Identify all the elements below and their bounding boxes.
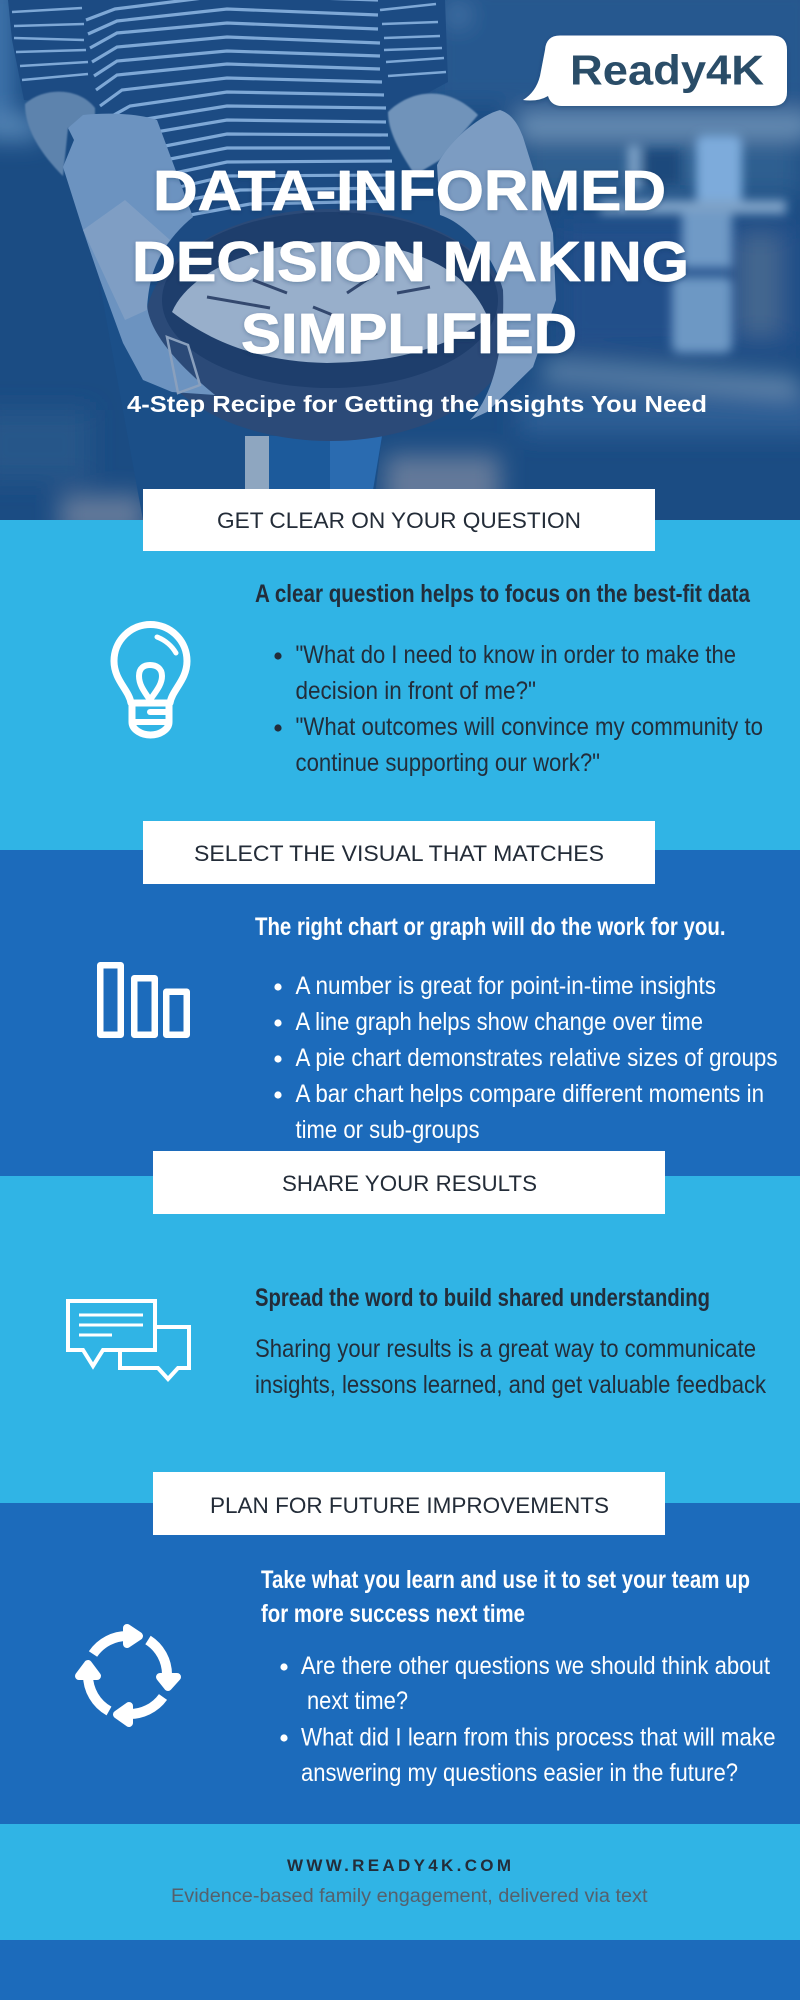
icon: light bulb [114, 624, 187, 735]
logo: Ready4K speech bubble: Ready4K [570, 46, 764, 94]
title: DECISION MAKING [132, 230, 689, 294]
banner: step 2: SELECT THE VISUAL THAT MATCHES [194, 841, 604, 866]
title: DATA-INFORMED [153, 159, 666, 223]
bullet list: step 4 [280, 1652, 776, 1787]
pie [172, 242, 488, 363]
bottom band [0, 1940, 800, 2000]
banner: step 1: GET CLEAR ON YOUR QUESTION [217, 508, 581, 533]
logo: Ready4K speech bubble [523, 36, 787, 106]
icon: speech bubbles [68, 1301, 189, 1379]
arms [25, 92, 478, 176]
right oven mitt [437, 110, 556, 420]
title: SIMPLIFIED [241, 302, 577, 366]
bullet list: step 1: "What do I need to know in order to make the [296, 641, 736, 669]
bullet list: step 2: A line graph helps show change over time [296, 1008, 703, 1036]
banner: step 4 [153, 1472, 665, 1535]
panel: step 2 select the visual that matches [0, 821, 800, 1176]
banner: step 3 [153, 1151, 665, 1214]
icon: cycle arrows [79, 1628, 177, 1723]
footer tagline: Evidence-based family engagement, delivered via text [171, 1886, 648, 1907]
heading: step 4: for more success next time [261, 1600, 525, 1628]
bullet list: step 4: answering my questions easier in the future? [301, 1759, 738, 1787]
left oven mitt [63, 114, 215, 395]
banner: step 1 [143, 489, 655, 551]
bullet list: step 2: A number is great for point-in-time insights [296, 972, 716, 1000]
trousers [245, 436, 382, 489]
paragraph: step 3 [255, 1335, 766, 1399]
bullet list: step 1: continue supporting our work?" [296, 749, 600, 777]
bullet list: step 4: next time? [307, 1687, 408, 1715]
bullet list: step 1 [274, 641, 763, 777]
subtitle: 4-Step Recipe for Getting the Insights You Need [127, 391, 707, 417]
panel: step 3 share your results [0, 1151, 800, 1503]
icon: bar chart [100, 965, 187, 1035]
hero photo: baker holding a pie, blue duotone [0, 0, 800, 535]
banner: step 3: SHARE YOUR RESULTS [282, 1171, 537, 1196]
banner: step 2 [143, 821, 655, 884]
bullet list: step 2: time or sub-groups [296, 1116, 480, 1144]
title [132, 159, 689, 366]
panel: step 4 plan for future improvements [0, 1472, 800, 1824]
panel: step 1 get clear on your question [0, 489, 800, 850]
bullet list: step 2 [274, 972, 778, 1144]
heading: step 4 [261, 1566, 750, 1628]
footer website: WWW.READY4K.COM [287, 1856, 511, 1875]
shirt and apron [8, 0, 448, 520]
banner: step 4: PLAN FOR FUTURE IMPROVEMENTS [210, 1493, 609, 1518]
bullet list: step 1: decision in front of me?" [296, 677, 536, 705]
footer band [0, 1824, 800, 1940]
pan [145, 209, 515, 441]
shirt sleeves [12, 4, 446, 80]
shirt stripes [86, 0, 394, 215]
